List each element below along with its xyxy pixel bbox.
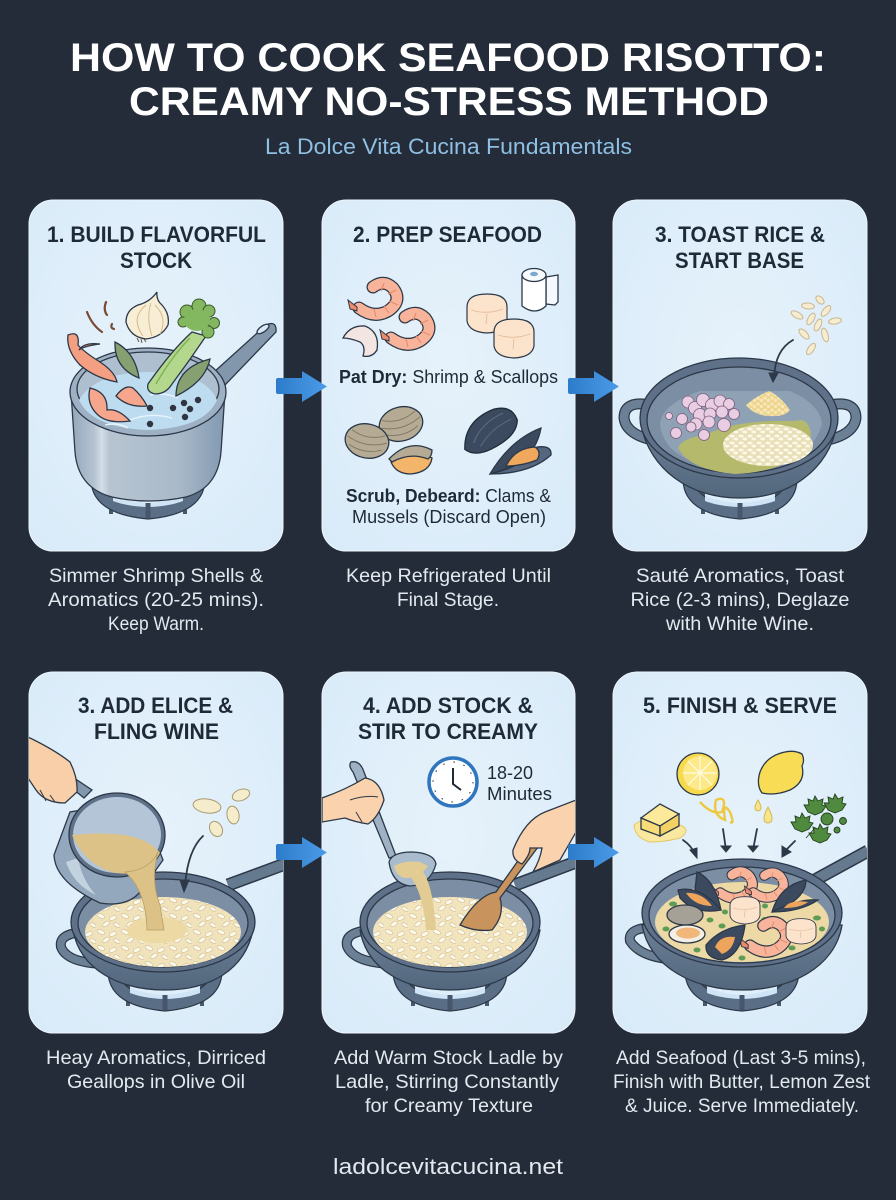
caption: step 1: Simmer Shrimp Shells & — [49, 565, 263, 587]
label: cook time — [487, 763, 552, 804]
arrow: step 4 to 5 — [568, 837, 619, 868]
label: cook time: Minutes — [487, 784, 552, 804]
icon: wide pan with ladle and spoon — [322, 762, 576, 1011]
label: pat dry: Pat Dry: Shrimp & Scallops — [339, 367, 558, 387]
icon: lemon zest — [700, 799, 732, 823]
scallops in pan — [730, 897, 816, 944]
garlic — [746, 391, 790, 416]
peppercorns — [147, 397, 201, 427]
panel: step 2 prep seafood — [322, 200, 575, 551]
icon: scallops — [467, 294, 534, 358]
panel: step 1 build flavorful stock — [29, 200, 283, 551]
caption: step 4 — [334, 1047, 563, 1117]
caption: step 1: Aromatics (20-25 mins). — [48, 589, 264, 611]
shrimp in pan — [711, 872, 787, 954]
caption: step 4: Ladle, Stirring Constantly — [335, 1071, 559, 1093]
icon: pan with aromatics and rice — [624, 358, 856, 519]
shallots — [666, 394, 740, 440]
caption: step 4: for Creamy Texture — [365, 1095, 533, 1117]
risotto base — [655, 882, 829, 962]
heading: step 3 add — [78, 693, 233, 744]
panel: step 3 add rice and fling wine — [28, 672, 285, 1033]
label: cook time: 18-20 — [487, 763, 533, 783]
icon: lemon — [758, 751, 804, 794]
icon: clams — [342, 402, 432, 474]
heading: step 3 toast: START BASE — [675, 248, 804, 273]
olive oil — [678, 420, 811, 474]
shrimp shells — [87, 302, 114, 332]
arrow: step 2 to 3 — [568, 371, 619, 402]
caption: step 3 add: Heay Aromatics, Dirriced — [46, 1047, 266, 1069]
caption: step 5 — [613, 1047, 871, 1117]
peas — [662, 902, 825, 960]
icon: stock pot on burner with ingredients — [68, 292, 276, 519]
arrow: rice into pan — [769, 340, 793, 382]
ladle — [350, 762, 436, 886]
label: scrub and debeard — [346, 486, 551, 527]
icon: falling rice — [192, 787, 251, 839]
panel: step 3 toast rice and start base — [613, 200, 867, 551]
icon: parsley — [791, 794, 846, 843]
title — [70, 36, 826, 124]
caption: step 5: Add Seafood (Last 3-5 mins), — [616, 1047, 866, 1069]
caption: step 3 add — [46, 1047, 266, 1093]
heading: step 1: 1. BUILD FLAVORFUL — [47, 222, 266, 247]
icon: butter — [634, 804, 686, 842]
mussels in pan — [678, 872, 818, 960]
panel: step 4 add stock and stir — [322, 672, 576, 1033]
heading: step 2: 2. PREP SEAFOOD — [353, 222, 542, 247]
caption: step 2 — [346, 565, 551, 611]
heading: step 5: 5. FINISH & SERVE — [643, 693, 837, 718]
arrow: step 3 to 4 — [276, 837, 327, 868]
risotto — [373, 897, 527, 967]
caption: step 3 toast — [630, 565, 850, 635]
icon: lemon drops — [755, 800, 772, 823]
celery — [148, 299, 220, 394]
icon: falling rice grains — [790, 294, 842, 356]
caption: step 3 toast: with White Wine. — [665, 613, 814, 635]
footer: website: ladolcevitacucina.net — [333, 1154, 563, 1179]
clam in pan — [667, 905, 705, 943]
label: scrub and debeard: Scrub, Debeard: Clams & — [346, 486, 551, 506]
panel: step 5 finish and serve — [613, 672, 868, 1033]
arrow: step 1 to 2 — [276, 371, 327, 402]
right hand — [513, 800, 576, 872]
caption: step 2: Keep Refrigerated Until — [346, 565, 551, 587]
caption: step 5: & Juice. Serve Immediately. — [625, 1095, 859, 1117]
arrow: rice into pan — [180, 836, 203, 892]
toasted rice — [723, 424, 813, 466]
stock stream — [411, 872, 436, 930]
icon: shrimp — [343, 283, 430, 356]
heading: step 4 — [358, 693, 538, 744]
caption: step 1 — [48, 565, 264, 635]
onion — [126, 292, 168, 343]
icon: mussels — [457, 404, 551, 474]
wooden spoon — [460, 847, 538, 930]
icon: finished risotto pan — [630, 851, 868, 1011]
title: CREAMY NO-STRESS METHOD — [129, 80, 769, 124]
label: scrub and debeard: Mussels (Discard Open) — [352, 507, 546, 527]
heading: step 4: 4. ADD STOCK & — [363, 693, 533, 718]
title: HOW TO COOK SEAFOOD RISOTTO: — [70, 36, 826, 80]
icon: paper towel roll — [522, 268, 558, 311]
heading: step 4: STIR TO CREAMY — [358, 719, 538, 744]
heading: step 1: STOCK — [120, 248, 193, 273]
arrows: ingredients into pan — [683, 829, 795, 858]
saucepan — [54, 770, 165, 904]
caption: step 3 add: Geallops in Olive Oil — [67, 1071, 245, 1093]
caption: step 3 toast: Sauté Aromatics, Toast — [636, 565, 845, 587]
bay leaves — [115, 342, 210, 396]
hand — [28, 737, 77, 803]
left hand — [322, 778, 384, 824]
icon: clock — [429, 758, 477, 806]
caption: step 1: Keep Warm. — [108, 613, 204, 635]
caption: step 4: Add Warm Stock Ladle by — [334, 1047, 563, 1069]
caption: step 5: Finish with Butter, Lemon Zest — [613, 1071, 871, 1093]
heading: step 3 toast: 3. TOAST RICE & — [655, 222, 825, 247]
heading: step 3 add: 3. ADD ELICE & — [78, 693, 233, 718]
risotto — [85, 897, 241, 967]
icon: lemon slice — [677, 753, 719, 795]
caption: step 3 toast: Rice (2-3 mins), Deglaze — [630, 589, 850, 611]
subtitle: La Dolce Vita Cucina Fundamentals — [265, 134, 632, 159]
heading: step 1 — [47, 222, 266, 273]
heading: step 3 toast — [655, 222, 825, 273]
caption: step 2: Final Stage. — [397, 589, 499, 611]
icon: wide pan with risotto and pouring wine — [28, 737, 285, 1011]
pouring stream — [125, 852, 164, 930]
shrimp in water — [68, 334, 147, 422]
heading: step 3 add: FLING WINE — [94, 719, 219, 744]
